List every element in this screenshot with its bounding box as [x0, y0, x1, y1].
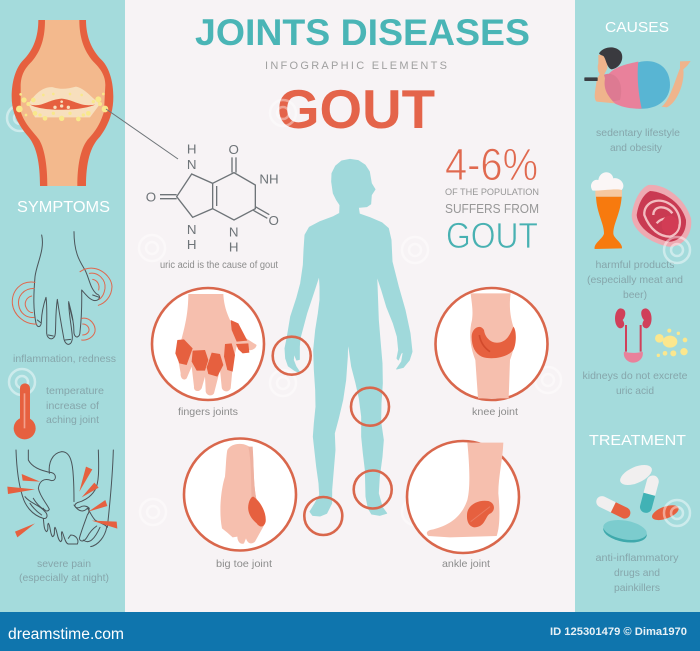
label: temperature: temperature: [46, 386, 104, 397]
label: harmful products: (especially meat and: [587, 275, 683, 286]
chart: uric acid molecule: NH: [259, 171, 279, 186]
callout: knee circle: [436, 288, 548, 400]
watermark over gout heading: [270, 100, 296, 126]
text: gout: GOUT: [446, 215, 538, 256]
label: ankle joint: ankle joint: [442, 559, 490, 570]
chart: uric acid molecule: H: [229, 240, 238, 255]
label: sedentary lifestyle: sedentary lifestyle: [596, 128, 680, 139]
callout: fingers circle: [152, 288, 264, 400]
heading: symptoms: SYMPTOMS: [17, 199, 110, 216]
panel: left sidebar background: [0, 0, 125, 612]
label: kidneys: uric acid: [616, 386, 654, 397]
label: inflammation: inflammation, redness: [13, 354, 116, 365]
footer image id: ID 125301479 © Dima1970: [550, 626, 687, 638]
label: severe pain: severe pain: [37, 559, 91, 570]
panel: right sidebar background: [575, 0, 700, 612]
label: sedentary lifestyle: and obesity: [610, 143, 663, 154]
leader line from joint to molecule: [106, 109, 178, 159]
label: big toe joint: big toe joint: [216, 559, 272, 570]
stat: 4-6 percent: 4-6%: [445, 139, 538, 190]
ankle illustration: [427, 443, 503, 537]
chart: uric acid molecule: N: [229, 225, 238, 240]
title: JOINTS DISEASES: [195, 11, 530, 53]
chart: uric acid molecule: H: [187, 237, 196, 252]
hand illustration: [175, 294, 257, 395]
heading: gout: GOUT: [277, 78, 435, 140]
icon: woman lying on sofa with phone: [584, 47, 691, 109]
label: temperature: increase of: [46, 401, 99, 412]
knee illustration: [470, 293, 516, 398]
label: knee joint: knee joint: [472, 407, 518, 418]
label: kidneys: [582, 371, 688, 397]
foot illustration: [220, 444, 266, 544]
icon: kidneys and uric crystals: [615, 308, 688, 363]
icon: beer glass: [591, 172, 623, 249]
chart: uric acid molecule: N: [187, 222, 196, 237]
watermark spirals: [7, 105, 561, 525]
label: temperature: aching joint: [46, 415, 99, 426]
chart: uric acid molecule: N: [187, 157, 196, 172]
text: of the population: OF THE POPULATION: [445, 187, 539, 198]
label: severe pain: [19, 559, 109, 584]
callout: big toe circle: [184, 438, 296, 550]
chart: uric acid molecule: O: [146, 190, 156, 205]
icon: pills: [594, 461, 681, 546]
heading: causes: CAUSES: [605, 20, 669, 36]
label: fingers joints: fingers joints: [178, 407, 238, 418]
label: sedentary lifestyle: [596, 128, 680, 154]
icon: thermometer: [14, 383, 36, 439]
icon: foot gripped by hands with pain marks: [7, 450, 117, 547]
human body silhouette: [285, 159, 412, 516]
icon: inflamed joint cross-section: [12, 20, 113, 186]
label: anti-inflammatory: [596, 553, 679, 594]
watermark spirals over sidebar: [664, 237, 690, 526]
label: uric acid: uric acid is the cause of gout: [160, 260, 278, 271]
subtitle: INFOGRAPHIC ELEMENTS: [265, 60, 447, 72]
label: severe pain: (especially at night): [19, 573, 109, 584]
icon: hand with inflammation: [12, 232, 112, 344]
label: kidneys: kidneys do not excrete: [582, 371, 688, 382]
icon: meat steak: [632, 185, 691, 247]
text: suffers from: SUFFERS FROM: [445, 201, 539, 216]
chart: uric acid molecule: [146, 141, 279, 255]
small joint markers on body: [273, 337, 392, 535]
label: anti-inflammatory: anti-inflammatory: [596, 553, 679, 564]
footer bar: [0, 612, 700, 651]
callout: ankle circle: [407, 441, 519, 553]
footer logo: dreamstime.com: [8, 626, 124, 643]
chart: uric acid molecule: H: [187, 141, 196, 156]
label: harmful products: beer): [623, 290, 647, 301]
label: anti-inflammatory: painkillers: [614, 583, 660, 594]
label: anti-inflammatory: drugs and: [614, 568, 660, 579]
label: temperature: [46, 386, 104, 426]
heading: treatment: TREATMENT: [589, 432, 686, 449]
label: harmful products: [587, 260, 683, 301]
chart: uric acid molecule: O: [228, 142, 239, 157]
chart: uric acid molecule: O: [268, 213, 279, 228]
label: harmful products: harmful products: [596, 260, 674, 271]
